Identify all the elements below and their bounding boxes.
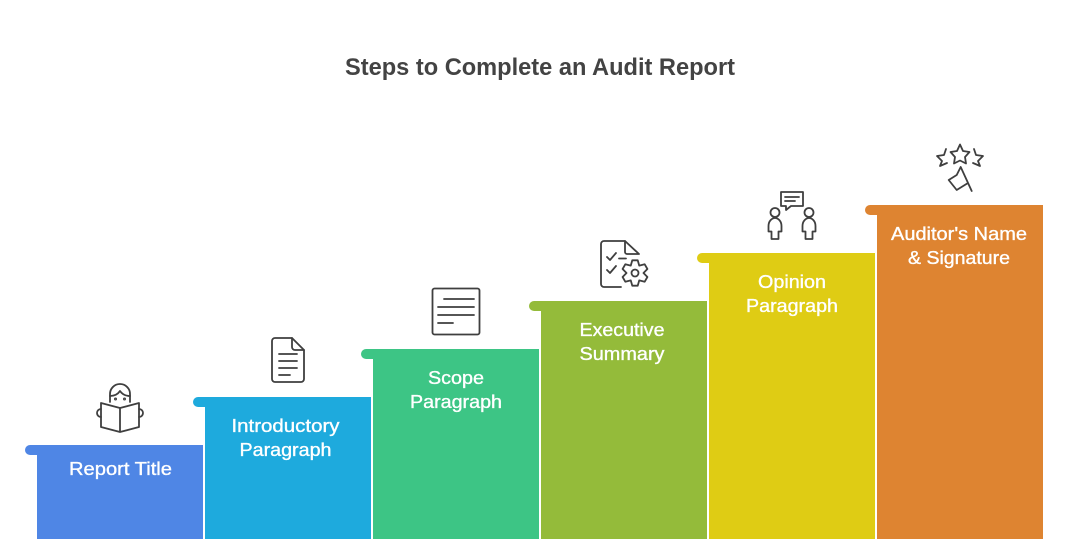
step 4: Executive Summary: Executive bbox=[580, 319, 664, 340]
step 4: Executive Summary bbox=[529, 301, 707, 539]
icon: checklist with gear bbox=[601, 241, 647, 287]
step 3: Scope Paragraph bbox=[361, 349, 539, 539]
step 2: Introductory Paragraph: Introductory bbox=[232, 415, 340, 436]
step 6: Auditor's Name & Signature: Auditor's Name bbox=[891, 223, 1027, 244]
step 6: Auditor's Name & Signature bbox=[865, 205, 1043, 539]
step 3: Scope Paragraph: Paragraph bbox=[410, 391, 502, 412]
step 5: Opinion Paragraph: Paragraph bbox=[746, 295, 838, 316]
title: Steps to Complete an Audit Report bbox=[345, 54, 735, 81]
step 5: Opinion Paragraph: Opinion bbox=[758, 271, 826, 292]
icon: document bbox=[272, 338, 304, 382]
step 6: Auditor's Name & Signature: & Signature bbox=[908, 247, 1010, 268]
icon: text page bbox=[432, 288, 480, 334]
icon: three stars with pennant bbox=[937, 144, 983, 191]
icon: two people talking bbox=[768, 192, 816, 239]
step 4: Executive Summary: Summary bbox=[580, 343, 665, 364]
step 2: Introductory Paragraph: Paragraph bbox=[240, 439, 332, 460]
step 5: Opinion Paragraph bbox=[697, 253, 875, 539]
icon: person reading book bbox=[97, 384, 143, 432]
step 3: Scope Paragraph: Scope bbox=[428, 367, 484, 388]
step 1: Report Title bbox=[25, 445, 203, 539]
step 2: Introductory Paragraph bbox=[193, 397, 371, 539]
step 1: Report Title: Report Title bbox=[69, 458, 172, 479]
